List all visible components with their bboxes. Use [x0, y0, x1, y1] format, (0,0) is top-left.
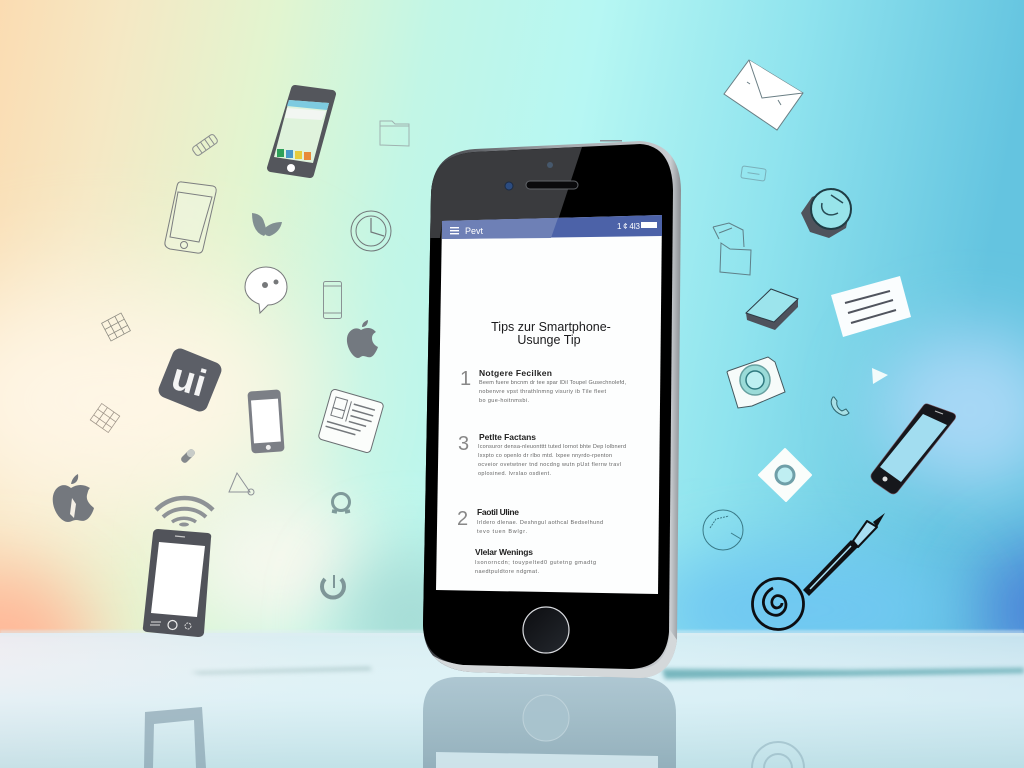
icon: dark phone [143, 529, 211, 637]
tip 2: tevo tuen Bwlgr. [477, 529, 527, 535]
tip 1 [460, 368, 626, 404]
icon: envelope [724, 60, 803, 130]
icon: keypad grid [102, 313, 130, 341]
icon: ui badge: ui [167, 356, 211, 406]
icon: pen [803, 513, 885, 596]
tip 1: bo gue-hoitnmsbi. [479, 398, 529, 404]
home button [523, 607, 569, 653]
icon: clock [351, 211, 391, 251]
tip 2: Faotil Uline [477, 507, 519, 517]
tip 3: Ixxpto co openlo dr rlbo mtd. Ixpee nnyrdo-rpenton [478, 453, 612, 459]
tip 3: Petlte Factans [479, 432, 536, 442]
icon: hex knob [801, 188, 851, 238]
icon: bandage [191, 133, 219, 157]
icon: folder [380, 121, 409, 146]
icon: grey phone [247, 389, 285, 454]
icon: timer [332, 494, 350, 512]
icon: outline phone [165, 182, 216, 253]
screen [436, 215, 662, 594]
icon: wifi [156, 498, 213, 526]
icon: dark smartphone with apps [271, 89, 332, 174]
icon: butterfly [252, 213, 282, 236]
phone face [423, 144, 673, 669]
tip 3: Iconsuror densa-nleuontttt tuted Iornot bhte Dep lolbnerd [478, 444, 626, 450]
tip 3: oplosined. lvrslao osdient. [478, 471, 551, 477]
icon: spiral [752, 578, 804, 630]
tip 2: 2 [457, 508, 468, 530]
status: 1 ¢ 4I3 [617, 222, 641, 231]
icon: tilted black phone [871, 404, 956, 494]
bar title: Pevt [465, 226, 484, 236]
sensor [505, 182, 513, 190]
icon: open folder [713, 223, 751, 275]
front camera [547, 162, 553, 168]
icon: small phone outline [324, 282, 342, 318]
icon: diamond tile [759, 449, 811, 501]
tip 2 [457, 507, 603, 535]
screen title: Usunge Tip [517, 333, 581, 347]
tip 4: Isonorncdn; touypelted0 gutetng gmadtg [475, 560, 596, 566]
icon: pill [180, 448, 196, 464]
battery [641, 222, 657, 228]
tip 3 [458, 432, 626, 477]
screen title [491, 320, 611, 347]
tip 1: Notgere Fecilken [479, 368, 552, 378]
icon: keypad grid small [90, 403, 120, 433]
tip 1: 1 [460, 368, 471, 390]
tip 4: naedtpuldtore ndgmat. [475, 569, 539, 575]
phone body [423, 141, 681, 678]
icon: note card [831, 276, 911, 337]
bottom metal edge [432, 630, 677, 678]
main smartphone [423, 140, 681, 678]
tip 1: Beem fuere bncnm dr tee spar lDil Toupel Gusechnolefd, [479, 380, 626, 386]
app bar [442, 215, 662, 239]
glare [430, 147, 582, 238]
screen title: Tips zur Smartphone- [491, 320, 611, 334]
icon: apple [347, 320, 378, 358]
floor shadows [190, 667, 1024, 679]
icon: camera blob [727, 357, 785, 408]
reflection: spiral [752, 742, 804, 768]
icon: small tag [741, 166, 766, 181]
reflection: main phone [423, 677, 676, 768]
side buttons [600, 140, 622, 142]
icon: chat bubble [245, 267, 287, 313]
icon: gauge [703, 510, 743, 550]
tip 2: Irldero dlenae. Deshngul aothcal Bedselhund [477, 520, 603, 526]
tip 4: Vlelar Wenings [475, 547, 533, 557]
reflective floor [0, 630, 1024, 768]
icon: play triangle [872, 368, 888, 384]
icon: document card [318, 389, 384, 453]
icon: drive box [746, 289, 798, 330]
tip 1: nobenvre vpst thrathlnmng visuriy ib Tile fleet [479, 389, 606, 395]
icon: large apple [53, 474, 94, 522]
icon: triangle [229, 473, 254, 495]
icon: ui badge [156, 346, 224, 414]
menu icon [450, 227, 459, 234]
reflection: dark phone [144, 707, 206, 768]
tip 4 [475, 547, 596, 575]
tip 3: ocveior ovetwtner tnd nocdng wutn pUst flerrw travl [478, 462, 621, 468]
speaker [526, 181, 578, 189]
icon: power [322, 575, 344, 598]
icon: handset [831, 397, 849, 415]
tip 3: 3 [458, 433, 469, 455]
